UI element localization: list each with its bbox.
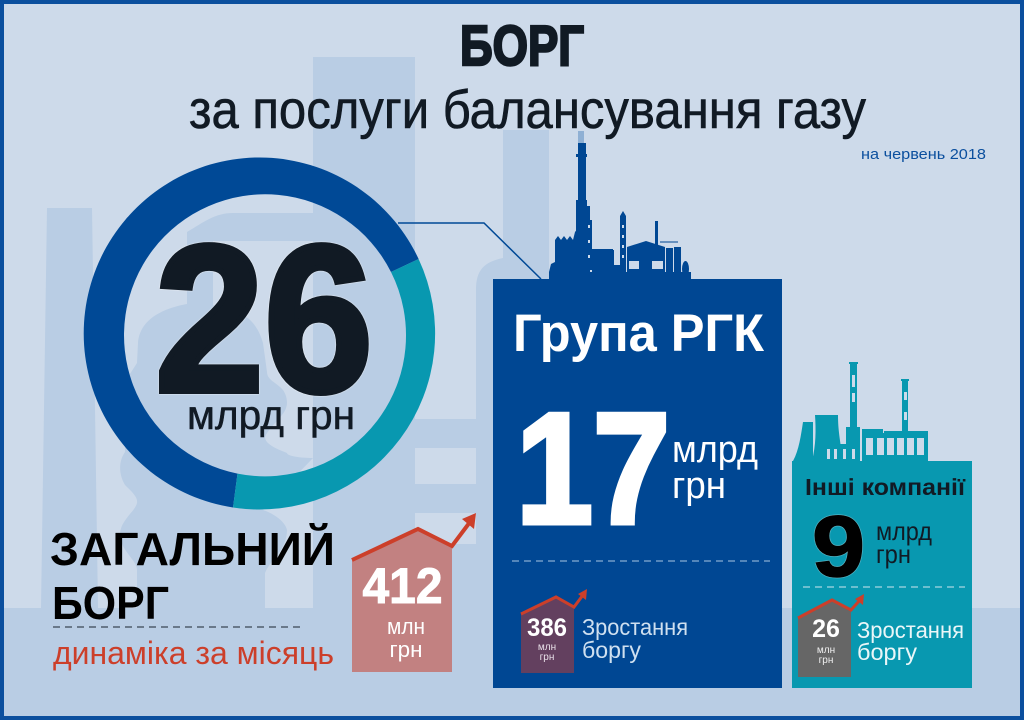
value 17: 17: [516, 381, 670, 557]
ring segment: РГК: [84, 158, 419, 507]
icon: house growth 412: [352, 513, 476, 672]
panel heading: Група РГК: [513, 304, 765, 363]
ring segment: other companies: [233, 259, 435, 510]
total unit: млрд грн: [187, 392, 355, 438]
growth label: боргу: [857, 639, 918, 665]
unit: млрд: [672, 429, 758, 471]
caption line 1: ЗАГАЛЬНИЙ: [50, 523, 335, 575]
dynamics label: динаміка за місяць: [53, 635, 334, 671]
growth label: [582, 614, 688, 663]
panel: Інші компанії: [792, 362, 972, 688]
icon: house growth 26: млн: [817, 645, 835, 656]
unit: грн: [672, 465, 726, 507]
icon: refinery skyline: [549, 131, 691, 280]
total debt caption: [50, 523, 335, 671]
growth label: [857, 617, 964, 665]
date note: на червень 2018: [861, 146, 986, 163]
icon: house growth 386: 386: [527, 614, 567, 642]
donut chart: total debt: [84, 158, 435, 510]
growth label: Зростання: [857, 617, 964, 643]
connector line from ring to group box: [398, 223, 541, 279]
panel body: [493, 279, 782, 688]
unit: [672, 429, 758, 507]
growth label: боргу: [582, 637, 641, 663]
icon: house growth 26: [798, 594, 864, 677]
icon: house growth 386: грн: [540, 652, 554, 663]
icon: house growth 412: 412: [362, 558, 442, 614]
value 9: 9: [812, 499, 865, 595]
unit: грн: [876, 539, 911, 569]
icon: house growth 386: млн: [538, 642, 556, 653]
icon: house growth 26: грн: [819, 655, 833, 666]
unit: млрд: [876, 516, 932, 546]
unit: [876, 516, 932, 569]
icon: house growth 386: [521, 589, 587, 673]
panel heading: Інші компанії: [805, 474, 966, 500]
icon: power plant skyline: [793, 362, 928, 462]
caption line 2: БОРГ: [52, 577, 169, 629]
panel body: [792, 461, 972, 688]
icon: house growth 412: млн: [387, 614, 425, 639]
title line 1: БОРГ: [460, 14, 584, 78]
total value: 26: [155, 203, 373, 436]
title: [189, 14, 986, 163]
panel: Група РГК: [493, 131, 782, 688]
icon: house growth 26: 26: [812, 615, 840, 643]
growth label: Зростання: [582, 614, 688, 640]
title line 2: за послуги балансування газу: [189, 80, 866, 140]
icon: house growth 412: грн: [390, 637, 422, 662]
